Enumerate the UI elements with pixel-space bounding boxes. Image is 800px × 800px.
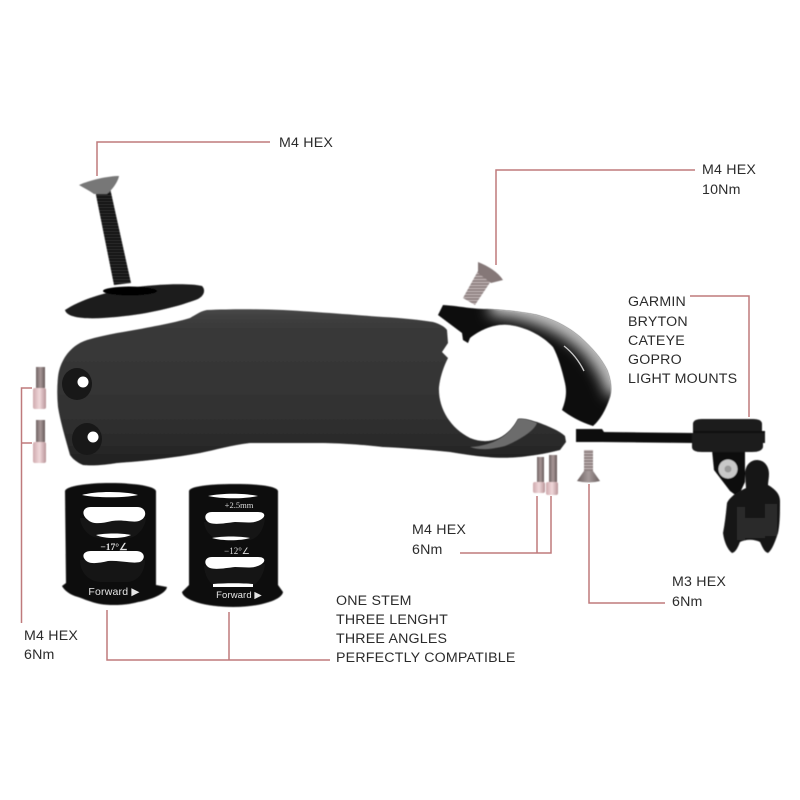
forward marking: Forward ▶ <box>216 590 262 601</box>
clamp bolt <box>463 262 503 305</box>
label: compatible mounts list: CATEYE <box>628 333 685 349</box>
label: clamp lower bolts <box>412 522 466 558</box>
lower sliver <box>213 583 253 587</box>
leader line: steerer bolts <box>22 388 32 623</box>
stem body <box>57 309 566 465</box>
label: steerer bolts: 6Nm <box>24 647 55 663</box>
label: clamp bolt: 10Nm <box>702 182 741 198</box>
leader line: mounts <box>690 296 749 417</box>
label: compatible mounts list: LIGHT MOUNTS <box>628 371 737 387</box>
upper slot <box>83 507 145 523</box>
mount disc <box>692 419 765 452</box>
top cap bolt <box>79 176 131 285</box>
label: top cap bolt: M4 HEX <box>279 135 333 151</box>
clamp bolt leader line <box>496 170 695 265</box>
label: clamp bolt <box>702 162 756 198</box>
label: M3 bolt: 6Nm <box>672 594 703 610</box>
exploded diagram of bicycle stem <box>20 138 781 662</box>
lower recess <box>204 564 265 587</box>
upper recess <box>80 518 146 538</box>
mount bolt <box>718 460 738 478</box>
lower slot <box>205 557 264 569</box>
label: spacers: THREE ANGLES <box>336 631 447 647</box>
angle marking: −12°∠ <box>224 546 250 556</box>
computer mount <box>576 419 780 553</box>
clamp lower bolts <box>533 455 558 495</box>
label: spacers: THREE LENGHT <box>336 612 448 628</box>
forward marking: Forward ▶ <box>88 586 140 598</box>
top cap <box>65 284 204 318</box>
mount bolt, M3 <box>577 450 600 482</box>
top opening <box>82 492 138 497</box>
label: clamp lower bolts: M4 HEX <box>412 522 466 538</box>
upper recess <box>204 518 265 540</box>
label: compatible mounts list <box>628 294 737 387</box>
label: compatible mounts list: GARMIN <box>628 294 686 310</box>
label: M3 bolt <box>672 574 726 610</box>
angle marking: −17°∠ <box>100 542 128 553</box>
label: steerer bolts <box>24 628 78 663</box>
spacer: -12 degrees <box>182 484 283 607</box>
label: compatible mounts list: GOPRO <box>628 352 682 368</box>
leader line: M3 bolt <box>589 484 665 603</box>
label: compatible mounts list: BRYTON <box>628 314 688 330</box>
leader line: top cap bolt <box>97 142 270 176</box>
leader line: spacers <box>107 610 330 660</box>
leader line: clamp lower bolts <box>460 496 551 553</box>
label: steerer bolts: M4 HEX <box>24 628 78 644</box>
top opening <box>208 494 258 498</box>
upper slot <box>205 512 264 524</box>
mount clip <box>723 460 780 553</box>
label: spacers: ONE STEM <box>336 593 412 609</box>
upper bolt hole <box>62 368 92 400</box>
label: spacers <box>336 593 516 666</box>
lower jaw inner face <box>470 419 537 449</box>
length marking: +2.5mm <box>225 500 254 510</box>
label: clamp bolt: M4 HEX <box>702 162 756 178</box>
clip interior <box>737 504 777 540</box>
label: clamp lower bolts: 6Nm <box>412 542 443 558</box>
middle sliver <box>96 534 131 538</box>
spacer: -17 degrees <box>62 483 167 605</box>
label: spacers: PERFECTLY COMPATIBLE <box>336 650 516 666</box>
faceplate clamp <box>438 304 618 426</box>
mount bracket <box>712 450 745 497</box>
lower bolt hole <box>72 423 102 455</box>
lower recess <box>80 560 145 582</box>
mount arm <box>576 429 693 443</box>
lower slot <box>83 551 144 563</box>
steerer bolts <box>33 367 46 463</box>
middle sliver <box>212 536 250 540</box>
label: M3 bolt: M3 HEX <box>672 574 726 590</box>
mount band shadow <box>693 431 765 433</box>
